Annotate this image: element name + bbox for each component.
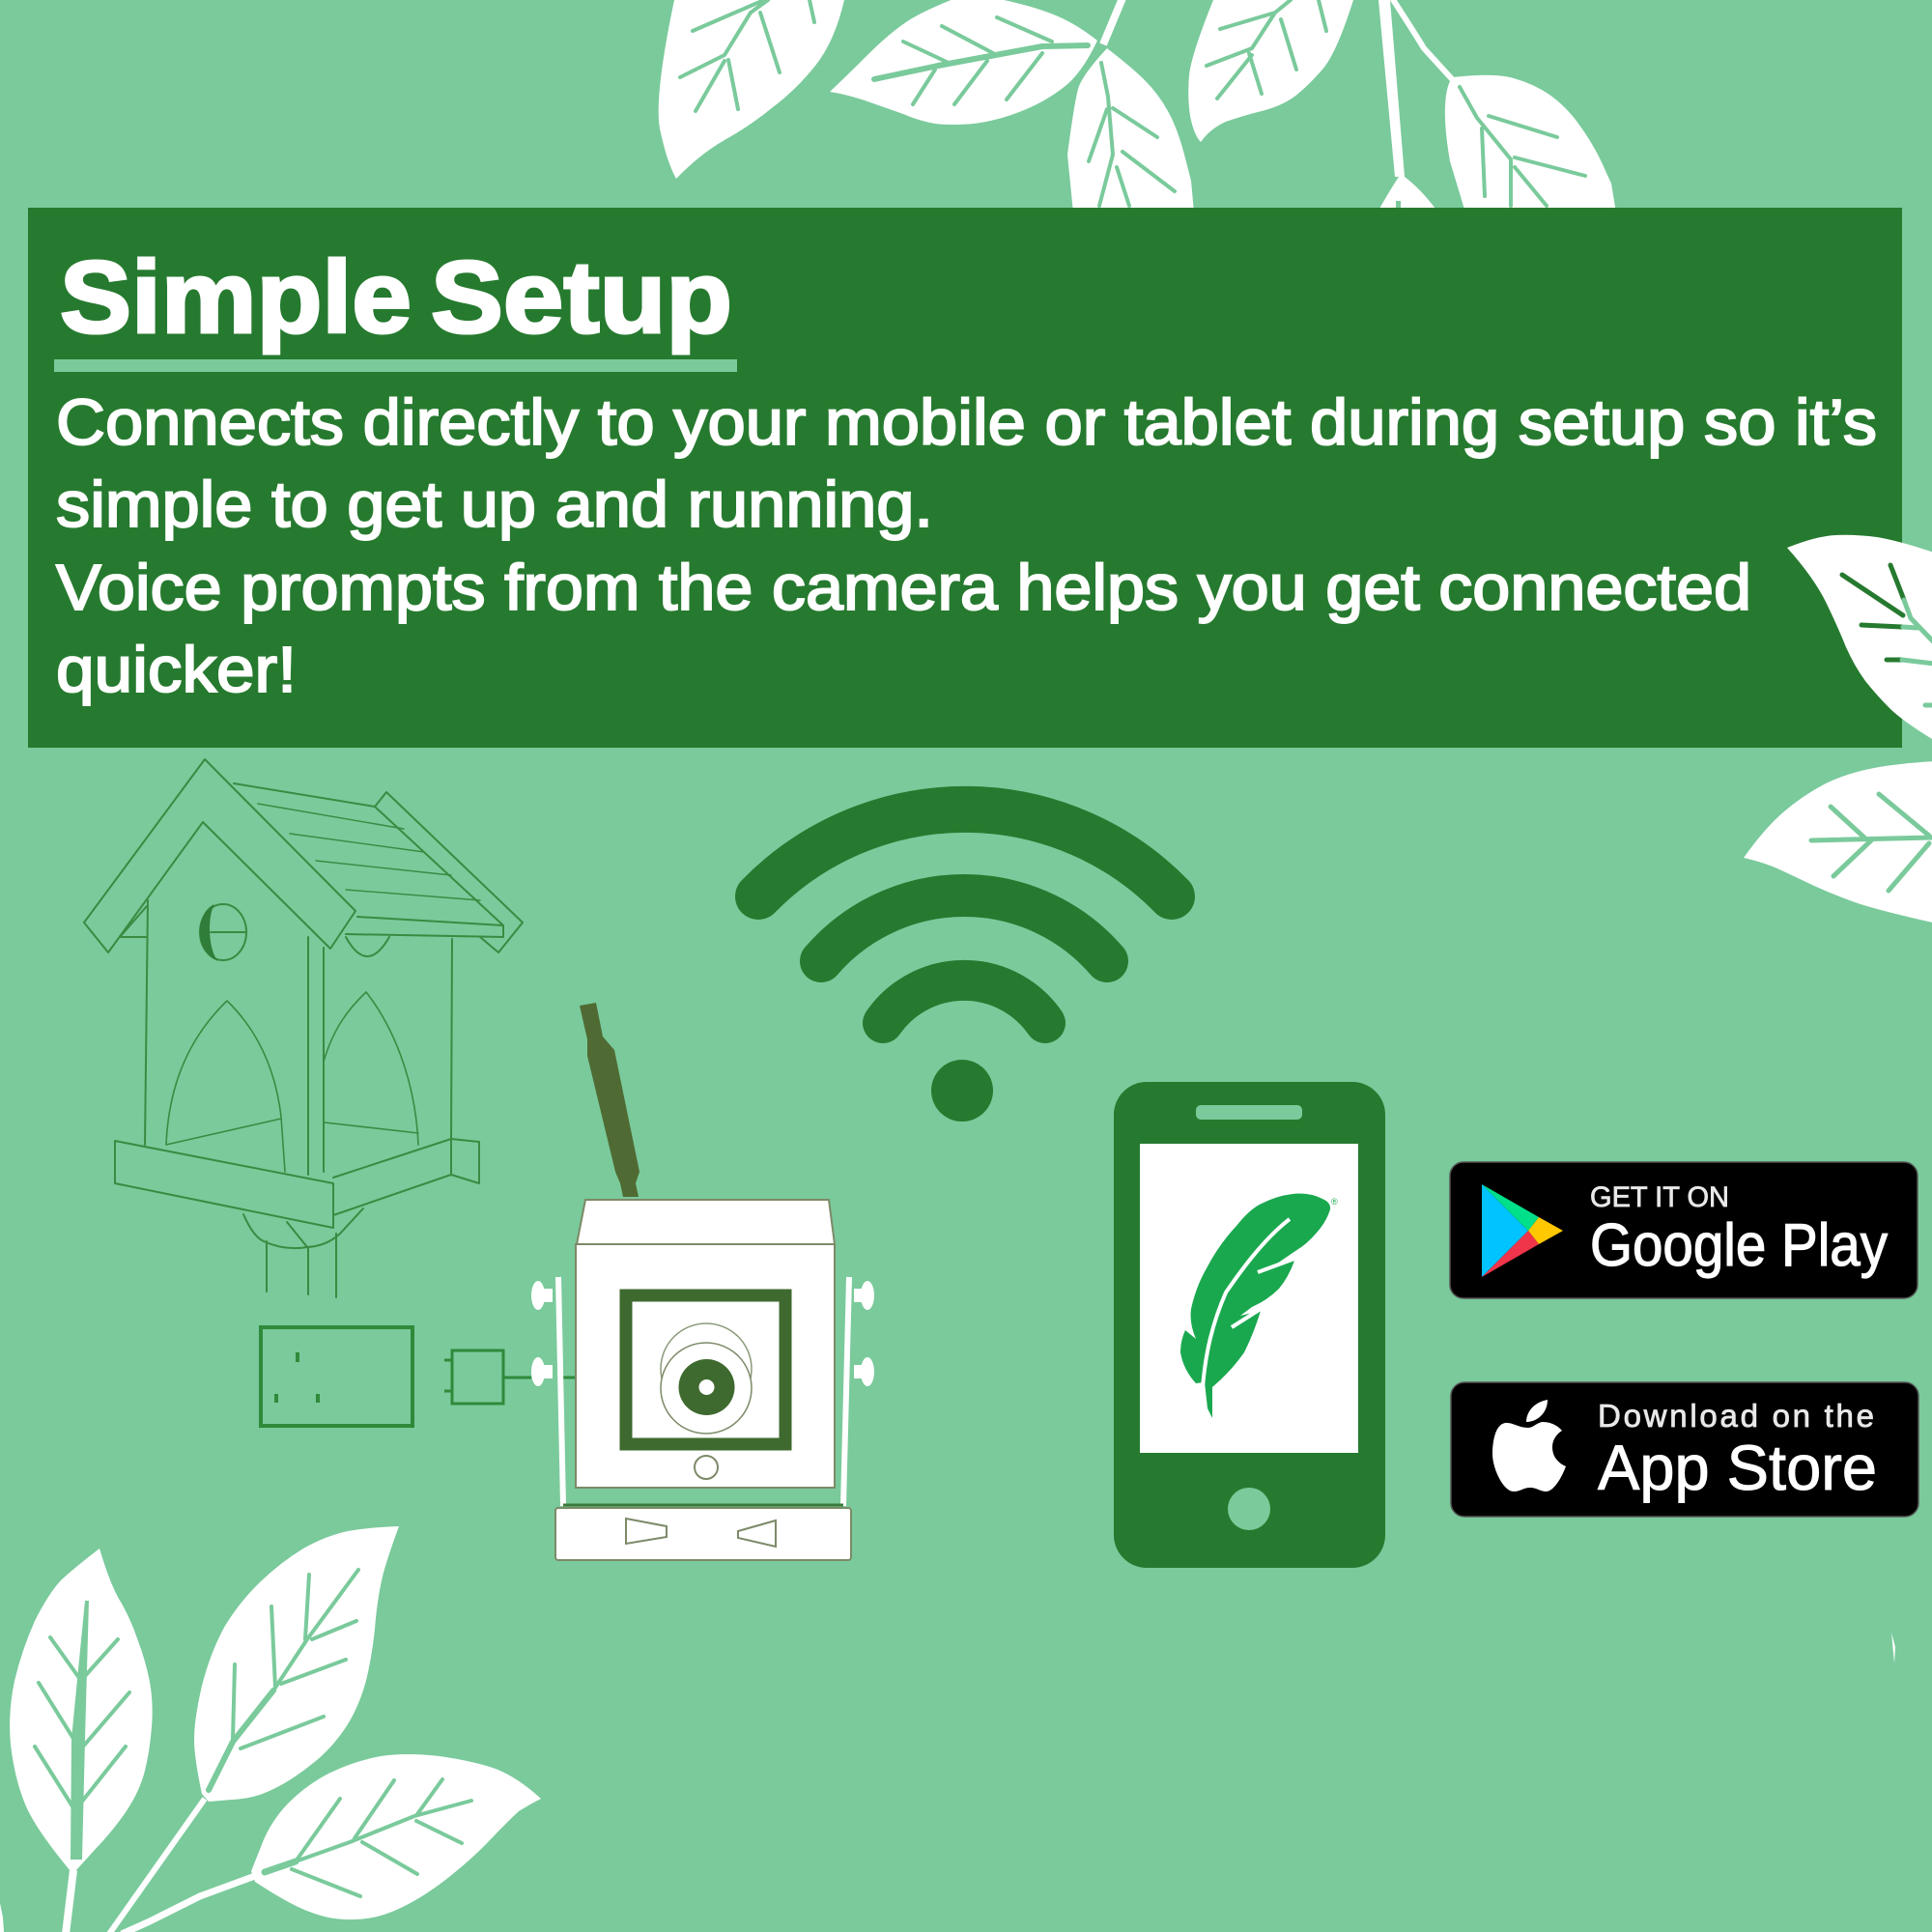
heading: Simple xyxy=(60,241,412,355)
phone body xyxy=(1114,1082,1385,1568)
leaf: right lower xyxy=(1744,761,1932,923)
leaf: top 2 xyxy=(830,0,1097,125)
badge store name: Google Play xyxy=(1590,1212,1888,1279)
body text: simple to get up and running. xyxy=(56,469,933,541)
leaf sliver: bottom edge xyxy=(0,1903,4,1932)
camera antenna xyxy=(580,1003,639,1197)
icon: mains socket xyxy=(261,1327,412,1426)
leaf: top 3 xyxy=(1067,48,1194,213)
top leaf branch xyxy=(659,0,1616,213)
right leaves xyxy=(1744,535,1932,923)
feeder tray xyxy=(115,1139,479,1228)
bottom left leaf branch xyxy=(0,1526,541,1932)
heading underline xyxy=(54,359,737,372)
feeder entrance hole xyxy=(200,904,246,961)
camera hood xyxy=(577,1200,835,1244)
leaf: middle xyxy=(194,1526,399,1802)
icon: bird feeder xyxy=(84,759,523,1297)
small white sliver xyxy=(1891,1633,1895,1663)
icon: apple logo xyxy=(1492,1400,1566,1492)
icon: wifi xyxy=(758,810,1172,1122)
camera mounting knobs xyxy=(531,1281,874,1386)
leaf: top 1 xyxy=(659,0,844,179)
icon: power plug and cable xyxy=(444,1350,576,1404)
icon: camera xyxy=(531,1003,874,1560)
body text: quicker! xyxy=(56,634,297,706)
camera button xyxy=(695,1456,718,1479)
feeder post xyxy=(243,1208,363,1297)
stem: top left xyxy=(1103,0,1122,44)
badge caption: Download on the xyxy=(1598,1398,1874,1434)
body text: Voice prompts from the camera helps you get connected xyxy=(56,552,1751,624)
phone screen xyxy=(1140,1144,1358,1453)
icon: phone with app xyxy=(1114,1082,1385,1568)
leaf: top 4 xyxy=(1188,0,1353,142)
camera lens frame xyxy=(626,1295,785,1444)
phone speaker xyxy=(1196,1105,1302,1120)
heading xyxy=(60,241,732,355)
badge: app store xyxy=(1451,1382,1918,1517)
heading: Setup xyxy=(431,241,732,355)
body text xyxy=(56,386,1877,706)
stem and bud: top right xyxy=(1378,0,1454,209)
icon: play triangle xyxy=(1482,1184,1563,1277)
body text: Connects directly to your mobile or tablet during setup so it’s xyxy=(56,386,1877,459)
feeder roof xyxy=(84,759,523,952)
leaf: right xyxy=(251,1754,541,1919)
badge store name: App Store xyxy=(1598,1432,1877,1503)
camera bracket xyxy=(558,1277,849,1506)
app feather logo xyxy=(1180,1194,1338,1418)
app feather logo: ® xyxy=(1331,1197,1338,1207)
leaf: right upper xyxy=(1787,535,1932,742)
camera body xyxy=(576,1244,835,1488)
leaf: top 5 xyxy=(1445,75,1616,213)
stems xyxy=(66,1799,255,1932)
badge: google play xyxy=(1450,1162,1918,1298)
camera base xyxy=(555,1508,851,1560)
feeder walls xyxy=(120,900,452,1175)
badge caption: GET IT ON xyxy=(1590,1181,1729,1213)
phone home button xyxy=(1228,1488,1270,1530)
leaf: left xyxy=(10,1548,153,1871)
camera lens xyxy=(661,1323,752,1434)
panel: simple setup xyxy=(28,208,1902,748)
